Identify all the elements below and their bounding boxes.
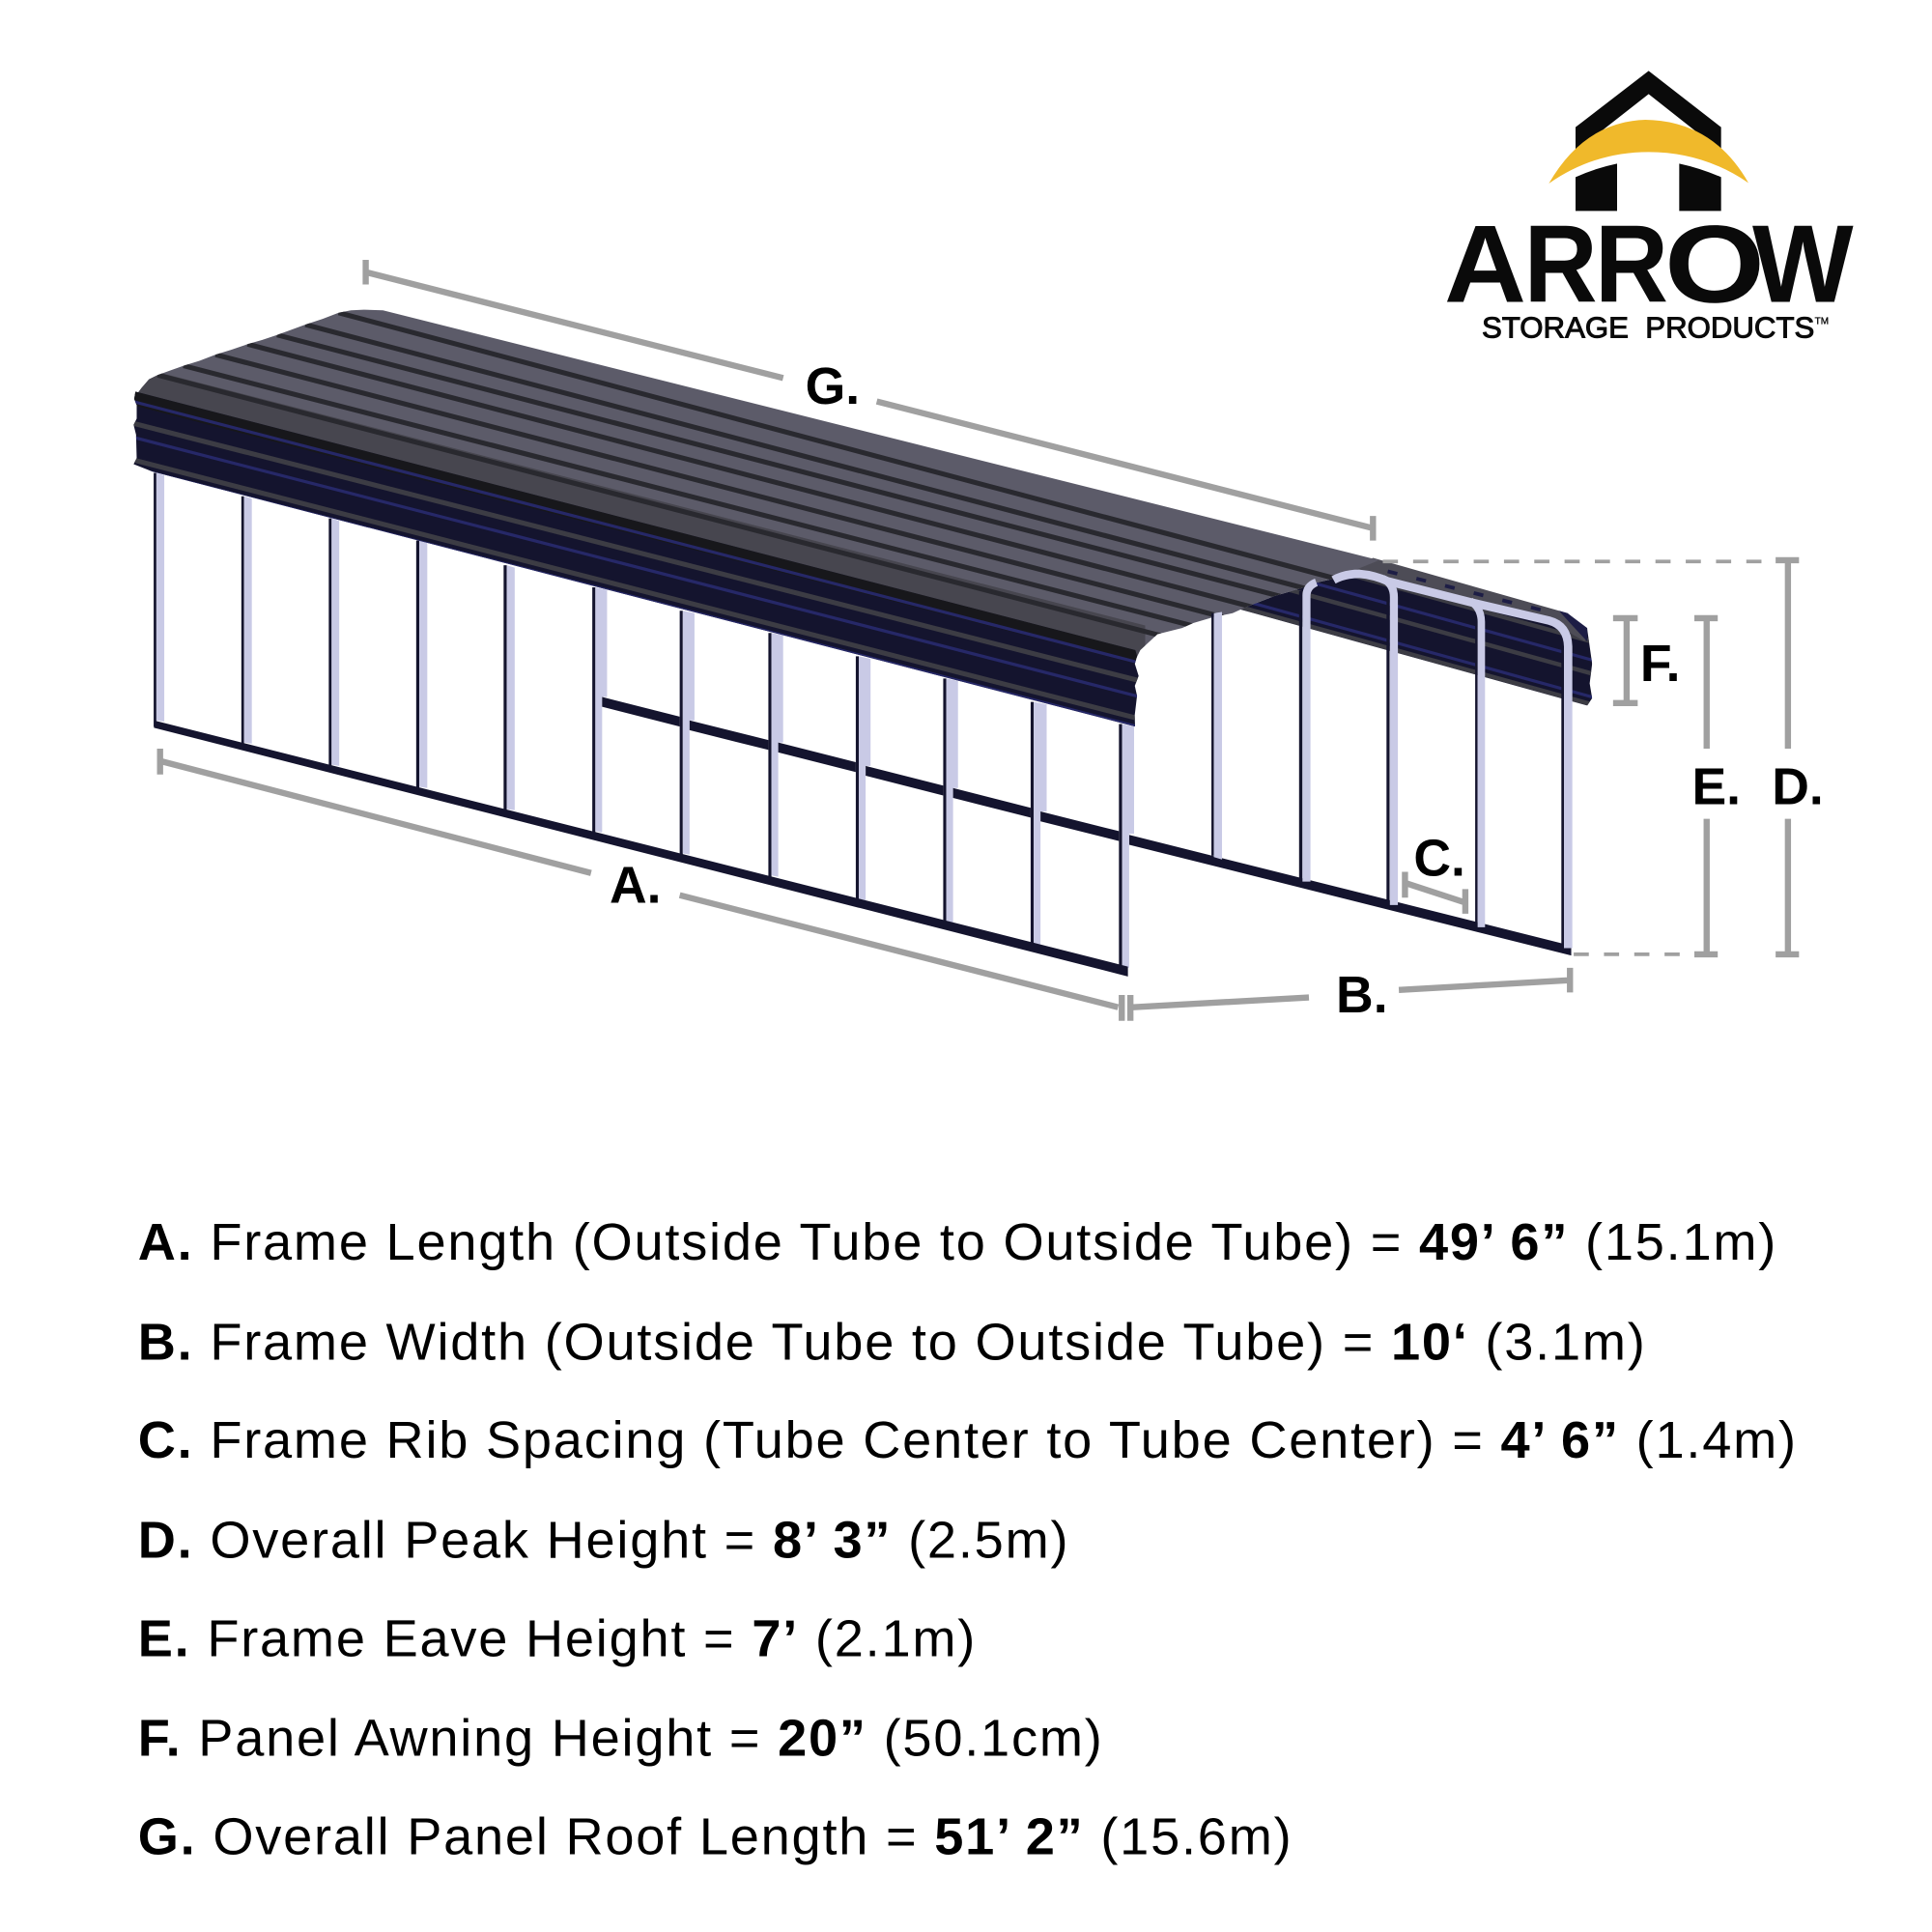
dimension letters: F. xyxy=(1640,636,1681,693)
specifications list: C. Frame Rib Spacing (Tube Center to Tube Center) = 4’ 6” (1.4m) xyxy=(138,1411,1798,1469)
logo wordmark: R xyxy=(1595,204,1668,327)
far wall base rail xyxy=(1129,835,1572,955)
specifications list: A. Frame Length (Outside Tube to Outside Tube) = 49’ 6” (15.1m) xyxy=(138,1213,1777,1271)
front end arch tube xyxy=(1334,574,1568,949)
dimension G xyxy=(366,260,1373,541)
logo wordmark xyxy=(1444,204,1854,327)
dimension letters: E. xyxy=(1691,758,1741,815)
logo wordmark: O xyxy=(1664,204,1765,327)
rear ridge strip xyxy=(1334,557,1587,641)
specifications list: F. Panel Awning Height = 20” (50.1cm) xyxy=(138,1710,1104,1768)
dimension letters xyxy=(610,358,1824,1024)
base dashed guide xyxy=(1574,952,1694,955)
specifications list xyxy=(138,1213,1798,1866)
dimension B xyxy=(1130,968,1570,1021)
rear roof overhang xyxy=(1240,578,1592,705)
specifications list: E. Frame Eave Height = 7’ (2.1m) xyxy=(138,1609,977,1667)
logo tagline: STORAGE PRODUCTS xyxy=(1482,311,1814,344)
far wall ribs xyxy=(1211,579,1565,951)
dimension C xyxy=(1405,871,1465,914)
logo: Arrow Storage Products xyxy=(1444,71,1854,344)
dimension letters: D. xyxy=(1772,758,1824,815)
dimension A xyxy=(160,749,1122,1021)
dimension letters: G. xyxy=(806,358,860,415)
side wall base rail xyxy=(154,721,1128,977)
logo wordmark: R xyxy=(1524,204,1598,327)
dimension letters: B. xyxy=(1336,967,1388,1024)
specifications list: B. Frame Width (Outside Tube to Outside Tube) = 10‘ (3.1m) xyxy=(138,1313,1647,1371)
logo wordmark: W xyxy=(1752,204,1854,327)
side wall mid rails xyxy=(602,696,1119,841)
specifications list: G. Overall Panel Roof Length = 51’ 2” (15.6m) xyxy=(138,1808,1293,1866)
dimension D xyxy=(1776,560,1799,954)
dimension F xyxy=(1613,618,1637,703)
carport diagram xyxy=(123,296,1601,977)
peak dashed guide xyxy=(1382,560,1774,563)
dimension lines xyxy=(160,260,1799,1021)
side wall ribs xyxy=(154,472,1134,973)
specifications list: D. Overall Peak Height = 8’ 3” (2.5m) xyxy=(138,1511,1069,1569)
logo house icon xyxy=(1548,71,1748,211)
dimension letters: C. xyxy=(1413,830,1465,887)
logo wordmark: A xyxy=(1444,204,1526,327)
logo trademark: TM xyxy=(1815,316,1829,327)
dimension letters: A. xyxy=(610,857,662,914)
front roof overhang xyxy=(123,382,1145,739)
roof top panel xyxy=(138,309,1378,658)
dimension E xyxy=(1694,618,1718,954)
